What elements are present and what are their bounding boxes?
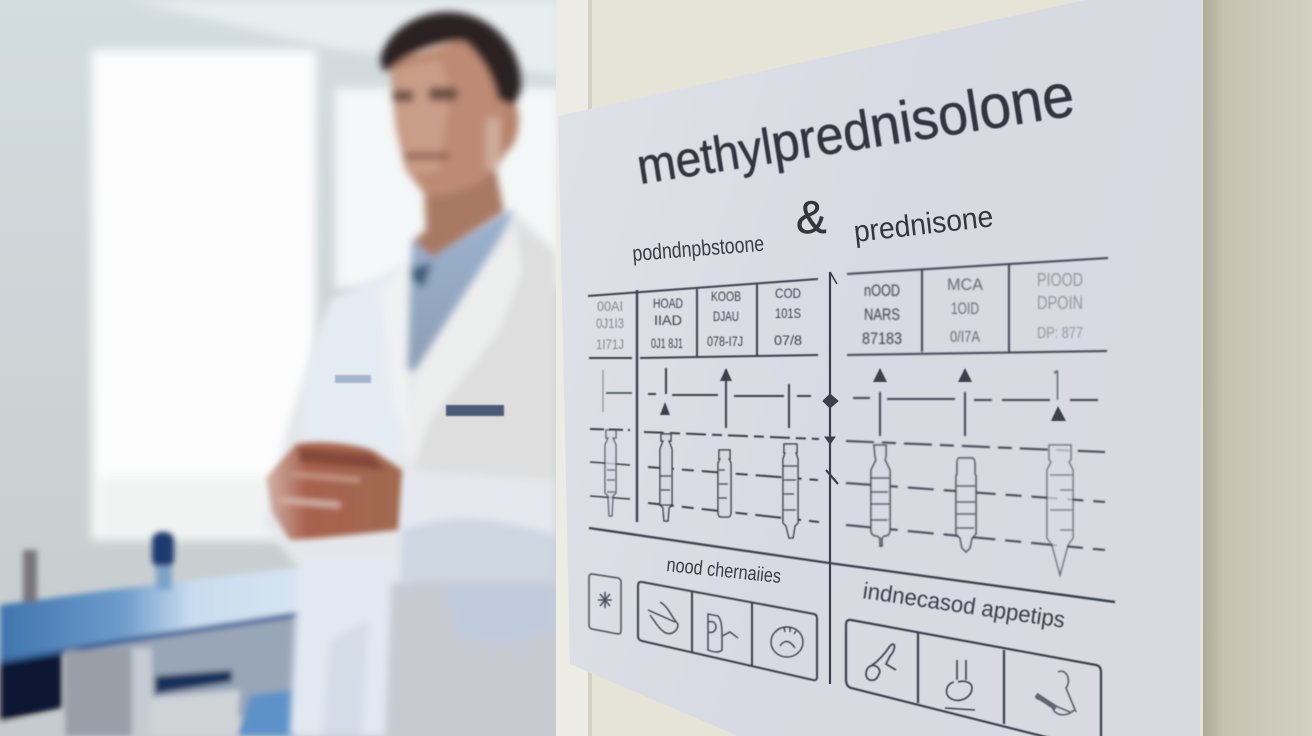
lapel (400, 225, 522, 470)
wall panel (556, 0, 1312, 736)
table text: right columns: PIOOD (1037, 270, 1083, 290)
table text: left columns: 1I71J (596, 336, 624, 352)
table text: right columns: 87183 (862, 329, 902, 348)
subtitle: prednisone: prednisone (852, 200, 995, 249)
table text: left columns: 07/8 (774, 332, 802, 348)
hands (266, 442, 402, 540)
tube 6 (956, 458, 976, 552)
test tubes: right (871, 445, 1073, 575)
section label: left: nood chernaiies (665, 554, 782, 588)
table text: left columns: HOAD (653, 295, 683, 311)
coat badges (335, 375, 504, 416)
cheek highlight (486, 118, 500, 170)
icon: blurred symbol (1036, 671, 1076, 715)
table text: left columns: 0J1I3 (596, 315, 624, 331)
left icon box (589, 574, 621, 634)
tube 4 (783, 444, 798, 538)
subtitle: left drug: podndnpbstoone (631, 231, 765, 266)
tube 5 (871, 445, 890, 546)
sleeve (395, 468, 556, 640)
tube 1 (605, 430, 616, 516)
coat front edge (290, 560, 392, 736)
poster board (558, 0, 1202, 736)
left triple box (638, 582, 817, 680)
hair (380, 12, 521, 106)
icon: flask (945, 660, 975, 710)
ampersand: & (796, 191, 827, 243)
chart grid: left (588, 279, 819, 522)
table text: right columns: nOOD (864, 281, 900, 300)
tube 2 (660, 434, 672, 521)
tube 7 (1047, 445, 1073, 575)
poster content (588, 61, 1115, 736)
desk (0, 532, 320, 736)
pocket (445, 586, 556, 645)
ear (504, 104, 519, 152)
table text: left columns (596, 285, 802, 352)
table text: right columns: MCA (947, 275, 984, 294)
mouth (404, 152, 450, 160)
table text: right columns: DP: 877 (1037, 325, 1083, 342)
icon: face (771, 627, 803, 657)
table text: left columns: IIAD (654, 312, 682, 328)
title: methylprednisolone (631, 61, 1079, 198)
section label: right: indnecasod appetips (861, 577, 1067, 633)
central axis (823, 272, 838, 684)
main divider (589, 528, 1115, 602)
table text: left columns: KOOB (711, 288, 741, 304)
table text: left columns: DJAU (713, 308, 739, 324)
chart grid: right (846, 258, 1108, 550)
face (390, 40, 518, 196)
icon: kidney (708, 614, 738, 652)
table text: left columns: 00AI (597, 298, 623, 314)
table text: left columns: 0J1 8J1 (651, 335, 683, 351)
table text: right columns (862, 270, 1083, 348)
lower coat (385, 582, 556, 736)
table text: right columns: 0/I7A (950, 329, 980, 346)
head and shirt (380, 12, 521, 370)
table text: right columns: 1OID (951, 299, 979, 318)
shirt (408, 208, 515, 370)
table text: right columns: NARS (864, 305, 900, 324)
icon: stethoscope loop (866, 644, 896, 680)
right front panel (405, 222, 556, 480)
tube 3 (718, 450, 731, 517)
table text: right columns: DPOIN (1037, 293, 1083, 313)
window right (335, 88, 560, 288)
person in white lab coat (264, 12, 556, 736)
right triple box (846, 620, 1101, 736)
table text: left columns: 101S (775, 305, 801, 321)
arrows (660, 368, 1066, 421)
icon: organ (648, 602, 678, 634)
background: blurred clinic room (0, 0, 560, 736)
neck (414, 170, 504, 258)
left front panel (302, 262, 408, 460)
eyes (392, 90, 414, 102)
coat (264, 212, 556, 736)
table text: left columns: 078-I7J (707, 333, 743, 349)
window left (92, 50, 316, 540)
table text: left columns: COD (775, 285, 801, 301)
test tubes: left (605, 430, 798, 538)
